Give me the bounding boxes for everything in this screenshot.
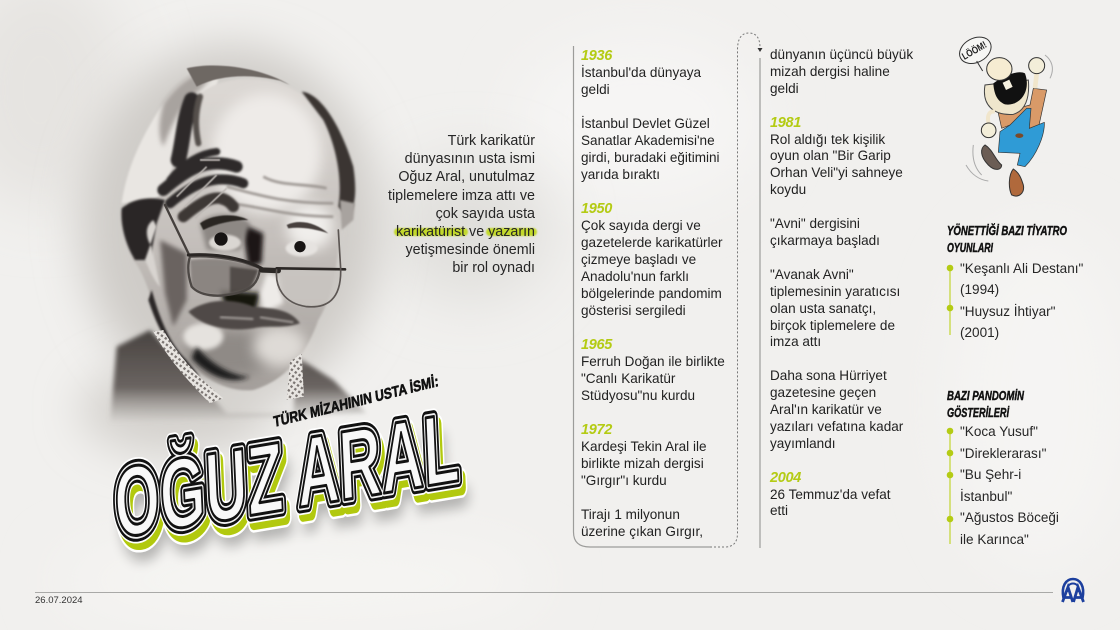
blue overalls <box>998 108 1044 167</box>
intro text highlight: yazarın <box>486 228 537 236</box>
speech bubble <box>955 32 996 71</box>
lens shading <box>190 259 258 295</box>
timeline column 1: 1936 İstanbul'da dünyaya geldi İstanbul Devlet Güzel Sanatlar Akademisi'ne girdi, buradaki eğitimini yarıda bıraktı 1950 Çok sayıda dergi ve gazetelerde karikatürler çizmeye başladı ve Anadolu'nun farklı bölgelerinde pandomim gösterisi sergiledi 1965 Ferruh Doğan ile birlikte "Canlı Karikatür Stüdyosu"nu kurdu 1972 Kardeşi Tekin Aral ile birlikte mizah dergisi "Gırgır"ı kurdu Tirajı 1 milyonun üzerine çıkan Gırgır, <box>581 48 725 539</box>
shirt collars <box>153 330 223 403</box>
list: directed plays: "Keşanlı Ali Destanı" (1994) "Huysuz İhtiyar" (2001) <box>960 261 1083 340</box>
main name: OĞUZ ARAL <box>112 391 461 559</box>
laughing mouth <box>993 72 1027 105</box>
eyebrows <box>200 215 248 230</box>
nose shadow <box>242 223 263 267</box>
glasses <box>165 205 345 307</box>
main name: OĞUZ ARAL <box>112 391 461 559</box>
footer date: 26.07.2024 <box>35 595 83 606</box>
list: pantomime shows: "Koca Yusuf" "Direklerarası" "Bu Şehr-i İstanbul" "Ağustos Böceği ile Karınca" <box>960 424 1059 546</box>
left ear <box>121 198 165 260</box>
subtitle: Türk mizahının usta ismi: TÜRK MİZAHININ USTA İSMİ: <box>273 373 439 431</box>
heading: pantomime shows <box>947 388 1025 420</box>
heading: directed plays: YÖNETTİĞİ BAZI TİYATRO <box>947 223 1067 238</box>
sweater <box>110 330 367 423</box>
raised arm <box>1035 68 1037 88</box>
main name: OĞUZ ARAL <box>112 391 461 559</box>
main name: OĞUZ ARAL <box>119 412 468 580</box>
shirt <box>998 88 1047 132</box>
heading: pantomime shows: BAZI PANDOMİN <box>947 388 1025 403</box>
heading: pantomime shows: GÖSTERİLERİ <box>947 405 1010 420</box>
moustache <box>188 301 300 329</box>
main name: OĞUZ ARAL <box>112 391 461 559</box>
heading: directed plays: OYUNLARI <box>947 241 993 255</box>
bullets: pantomime shows <box>947 428 953 544</box>
main name <box>112 390 468 581</box>
forehead wrinkles <box>220 177 333 217</box>
bullets: directed plays <box>947 265 953 335</box>
eye sockets <box>200 215 250 250</box>
upper shoe <box>982 145 1002 169</box>
motion lines <box>966 55 1052 181</box>
eyes <box>214 232 228 246</box>
timeline column 2: dünyanın üçüncü büyük mizah dergisi haline geldi 1981 Rol aldığı tek kişilik oyun olan "Bir Garip Orhan Veli"yi sahneye koydu "Avni" dergisini çıkarmaya başladı "Avanak Avni" tiplemesinin yaratıcısı olan usta sanatçı, birçok tiplemelere de imza attı Daha sona Hürriyet gazetesine geçen Aral'ın karikatür ve yazıları vefatına kadar yayımlandı 2004 26 Temmuz'da vefat etti <box>770 47 913 518</box>
intro text: Türk karikatür dünyasının usta ismi Oğuz Aral, unutulmaz tiplemelere imza attı ve çok sayıda usta karikatürist ve yazarın yetişmesinde önemli bir rol oynadı <box>388 133 535 276</box>
head and nose <box>987 58 1012 80</box>
head skin <box>127 79 342 390</box>
heading: directed plays <box>947 223 1067 255</box>
icon: AA logo <box>1062 579 1084 602</box>
speech bubble: LÖÖM! <box>959 38 989 63</box>
lower shoe <box>1009 169 1024 196</box>
intro text highlight: karikatürist <box>394 228 468 236</box>
right hair <box>302 92 355 217</box>
left hair <box>163 97 243 217</box>
main name: OĞUZ ARAL <box>115 399 464 567</box>
white hair flare <box>122 68 220 203</box>
face shadows <box>148 290 200 377</box>
main name: OĞUZ ARAL <box>115 399 464 567</box>
beard and left arm <box>984 80 1029 114</box>
